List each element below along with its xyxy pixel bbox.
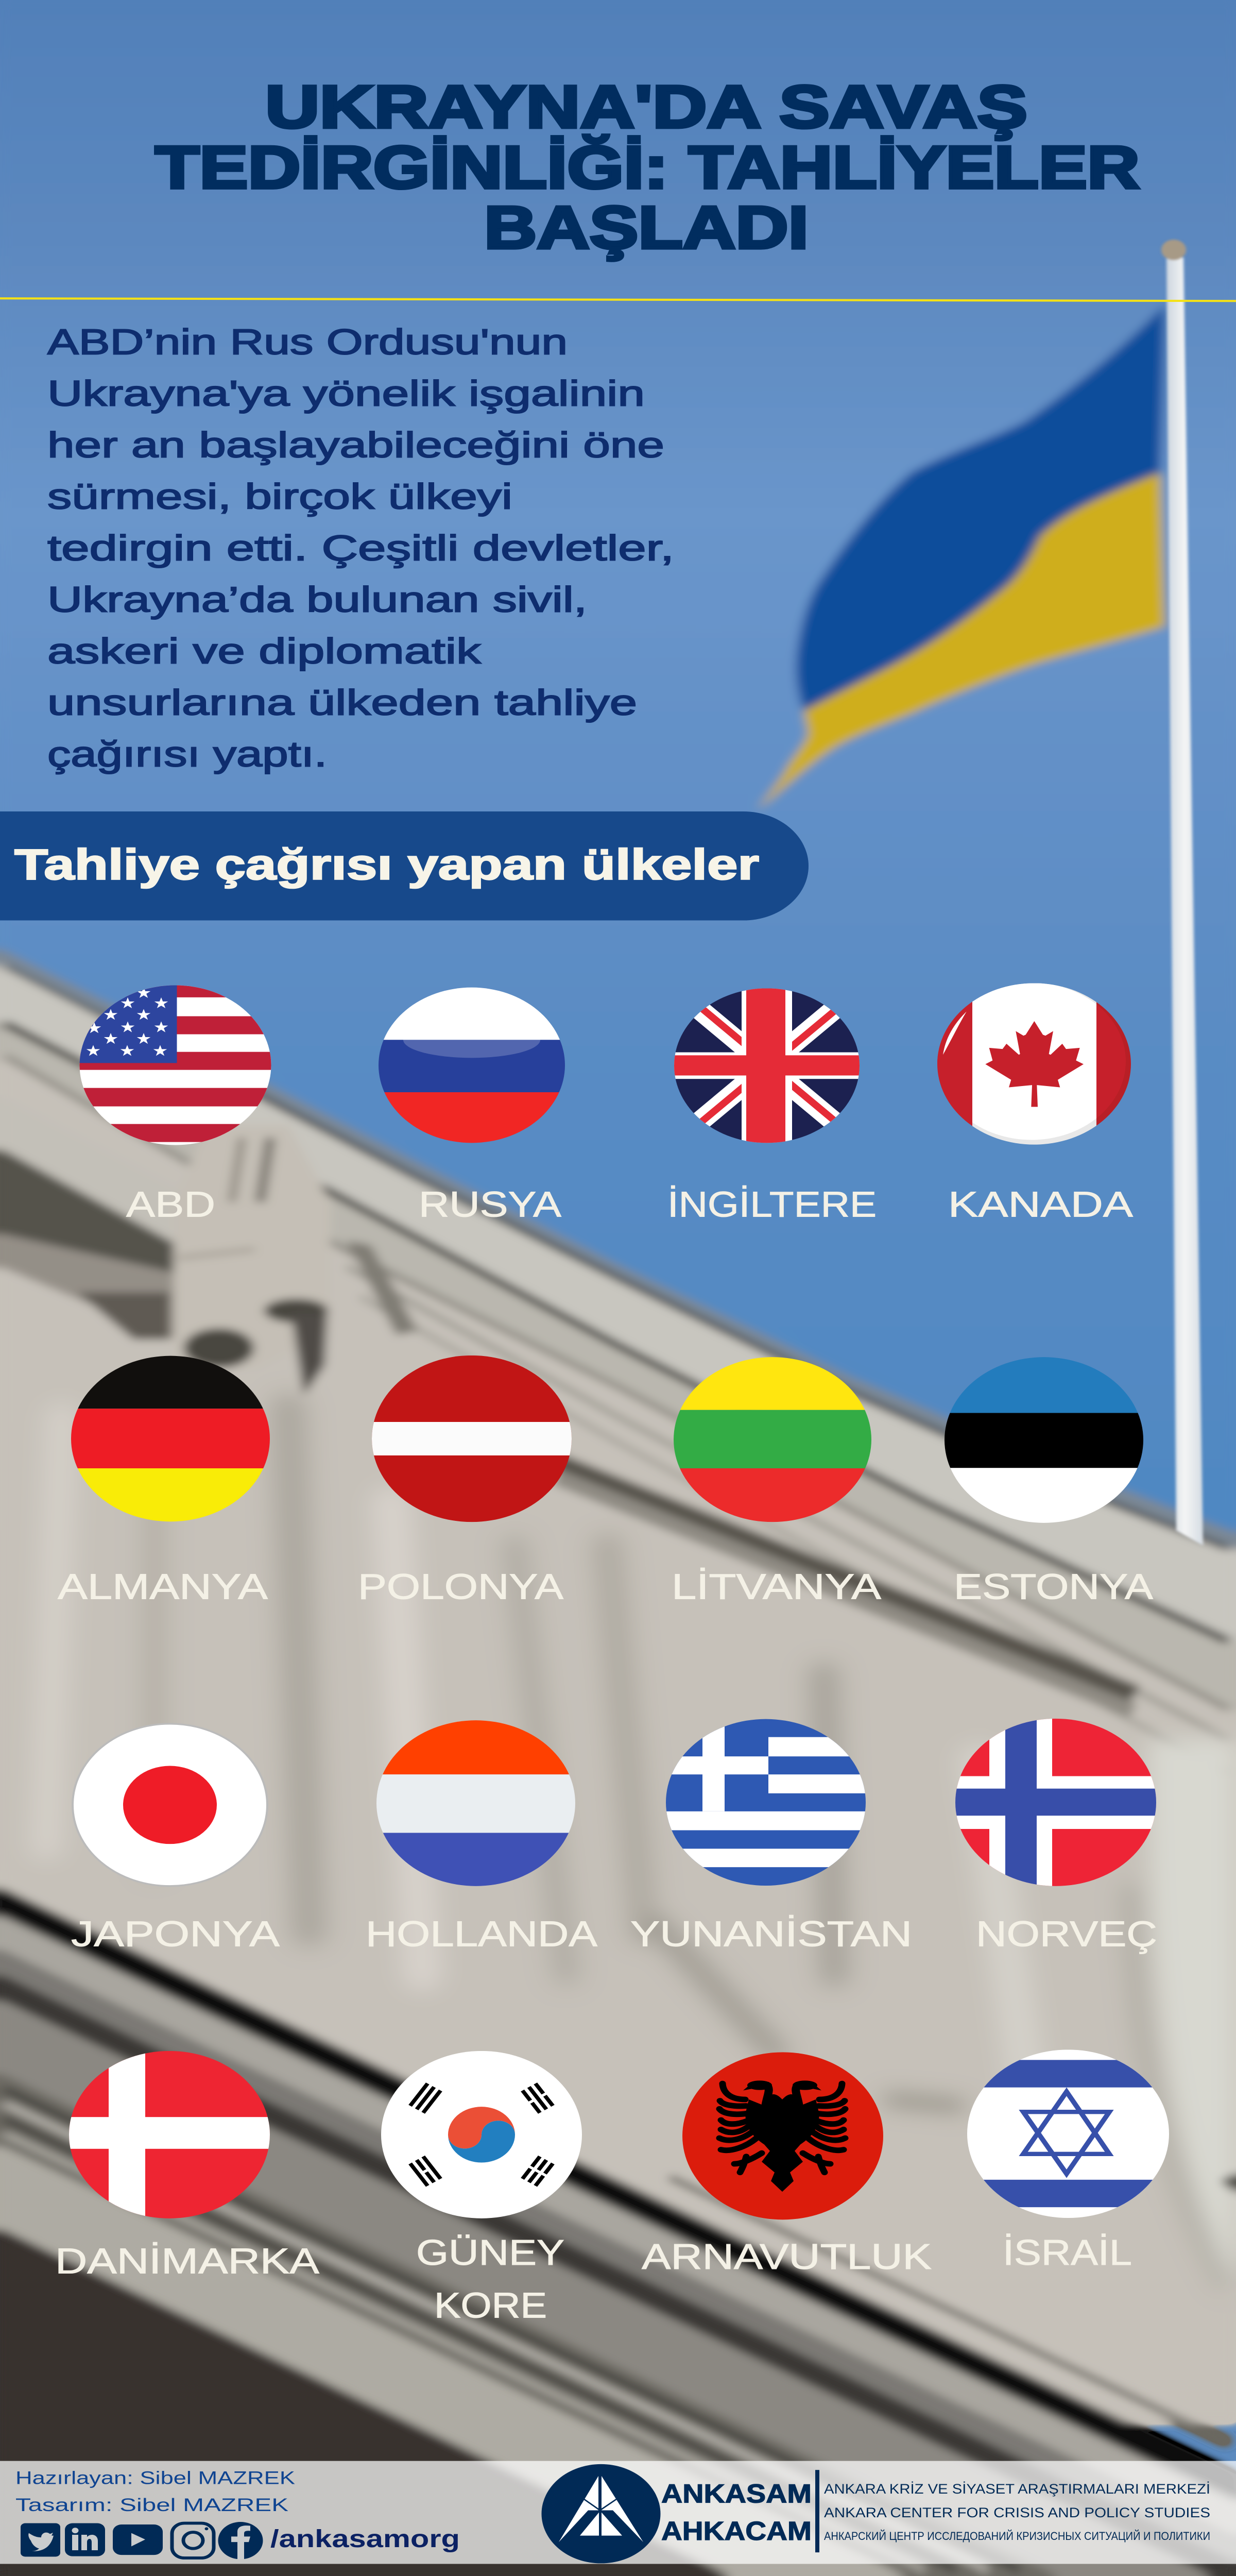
label: POLONYA: POLONYA [358,1567,563,1607]
label: GÜNEY KORE: GÜNEY [416,2232,564,2273]
flag: Germany [67,1352,273,1524]
intro text block: tedirgin etti. Çeşitli devletler, [47,528,674,568]
section heading pill: Tahliye çağrısı yapan ülkeler [14,841,759,889]
flag: United Kingdom [670,985,865,1148]
intro text block: sürmesi, birçok ülkeyi [47,477,512,517]
flag pole [1161,240,1203,1546]
organisation names [824,2481,1210,2543]
icon: instagram [172,2523,214,2558]
label: GÜNEY KORE [416,2232,564,2326]
intro text block: Ukrayna’da bulunan sivil, [47,580,587,620]
yellow divider line [0,298,1236,301]
title: BAŞLADI [484,194,809,261]
flag: Greece [662,1717,869,1889]
icon: youtube [113,2524,163,2555]
flag: Albania [682,2052,883,2219]
intro text block: Ukrayna'ya yönelik işgalinin [47,374,645,414]
intro text block: askeri ve diplomatik [47,631,481,671]
logo wordmarks: ANKASAM [661,2479,812,2508]
flag: Denmark [67,2048,273,2219]
logo divider [815,2470,819,2552]
intro text block [47,322,674,774]
flag: Netherlands [373,1717,579,1889]
flag: Israel [963,2048,1174,2219]
credits text [15,2468,295,2515]
flag label: İNGİLTERE: İNGİLTERE [667,1184,877,1225]
icon: facebook [218,2522,263,2560]
flag: Lithuania [670,1354,876,1524]
flag: Russia [376,985,568,1146]
logo: ANKASAM emblem [542,2464,660,2563]
logo wordmarks [661,2479,812,2546]
title [155,73,1140,261]
label: ALMANYA: ALMANYA [58,1567,268,1607]
flag: Norway [953,1717,1159,1889]
logo wordmarks: AHKACAM [661,2516,812,2546]
organisation names: ANKARA KRİZ VE SİYASET ARAŞTIRMALARI MERKEZİ [824,2481,1210,2497]
label: YUNANİSTAN: YUNANİSTAN [630,1914,912,1954]
credits text: Tasarım: Sibel MAZREK [15,2495,288,2515]
label: ARNAVUTLUK: ARNAVUTLUK [642,2237,932,2277]
intro text block: ABD’nin Rus Ordusu'nun [47,322,568,362]
intro text block: her an başlayabileceğini öne [47,425,664,465]
credits text: Hazırlayan: Sibel MAZREK [15,2468,295,2488]
title: TEDİRGİNLİĞİ: TAHLİYELER [155,134,1140,201]
title: UKRAYNA'DA SAVAŞ [265,73,1027,141]
label: KANADA: KANADA [948,1184,1133,1225]
label: JAPONYA: JAPONYA [71,1914,280,1954]
label: DANİMARKA: DANİMARKA [55,2241,319,2281]
flag: Poland (as drawn) [368,1352,574,1524]
label: ESTONYA: ESTONYA [954,1567,1153,1607]
footer band [0,2461,1236,2564]
intro text block: unsurlarına ülkeden tahliye [47,683,637,723]
label: GÜNEY KORE: KORE [434,2285,547,2326]
intro text block: çağırısı yaptı. [47,734,327,774]
flag: Estonia [942,1354,1148,1526]
label: LİTVANYA: LİTVANYA [672,1567,881,1607]
flag: Canada [935,981,1134,1148]
label: ABD: ABD [126,1184,215,1225]
label: RUSYA: RUSYA [419,1184,561,1225]
flag: Japan [73,1724,267,1886]
label: İSRAİL: İSRAİL [1003,2232,1132,2273]
label: NORVEÇ: NORVEÇ [976,1914,1157,1954]
label: HOLLANDA: HOLLANDA [366,1914,597,1954]
social handle: /ankasamorg [270,2526,460,2553]
flag: USA [77,983,273,1146]
flag: South Korea [381,2051,582,2218]
icon: twitter [21,2523,60,2556]
icon: linkedin [65,2523,105,2556]
section heading pill [0,811,809,921]
organisation names: ANKARA CENTER FOR CRISIS AND POLICY STUDIES [824,2505,1210,2520]
